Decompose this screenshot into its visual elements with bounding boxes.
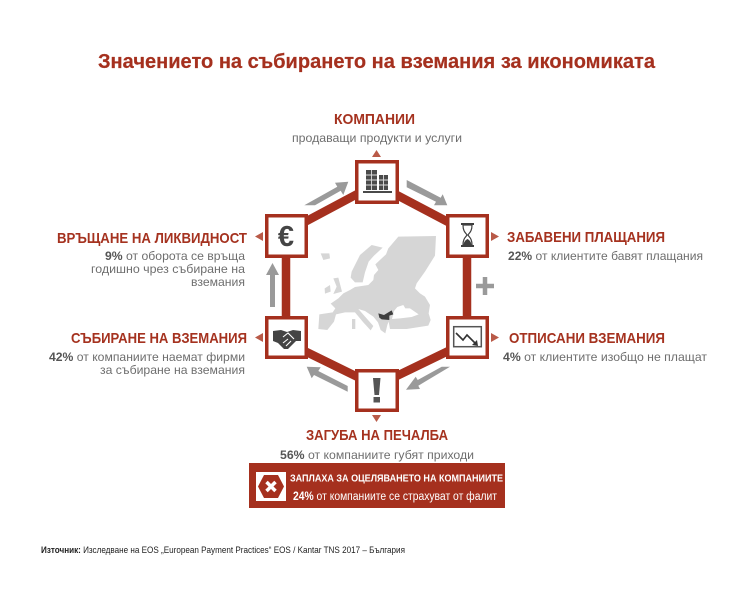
arrow: written-off to lost profit <box>406 367 450 390</box>
label: written-off receivables: 4% от клиентите изобщо не плащат <box>503 350 708 364</box>
box: debt collection with handshake icon <box>267 318 306 357</box>
icon: warning cross <box>256 472 286 501</box>
direction triangles <box>255 150 499 422</box>
label: debt collection: за събиране на вземания <box>100 363 245 377</box>
label: companies <box>292 111 462 145</box>
source note: Източник: Изследване на EOS „European Payment Practices“ EOS / Kantar TNS 2017 – България <box>41 545 405 555</box>
arrow: companies to delayed payments <box>407 180 447 205</box>
label: debt collection: 42% от компаниите наемат фирми <box>49 350 245 364</box>
label: written-off receivables: ОТПИСАНИ ВЗЕМАНИЯ <box>509 330 665 347</box>
label: delayed payments: 22% от клиентите бавят плащания <box>508 249 703 263</box>
label: liquidity return: годишно чрез събиране на <box>91 262 245 276</box>
callout: threat to survival: 24% от компаниите се страхуват от фалит <box>293 491 498 503</box>
box: delayed payments with hourglass icon <box>448 216 487 256</box>
label: liquidity return <box>57 230 247 289</box>
label: liquidity return: ВРЪЩАНЕ НА ЛИКВИДНОСТ <box>57 230 247 247</box>
label: debt collection: СЪБИРАНЕ НА ВЗЕМАНИЯ <box>71 330 247 347</box>
label: liquidity return: вземания <box>191 275 245 289</box>
label: delayed payments: ЗАБАВЕНИ ПЛАЩАНИЯ <box>507 229 665 246</box>
title: Значението на събирането на вземания за икономиката <box>98 50 656 73</box>
box: liquidity return with euro icon: € <box>278 221 294 253</box>
label: liquidity return: 9% от оборота се връща <box>105 249 245 263</box>
label: written-off receivables <box>503 330 708 364</box>
callout: threat to survival: ЗАПЛАХА ЗА ОЦЕЛЯВАНЕТО НА КОМПАНИИТЕ <box>290 472 503 484</box>
red hexagon connector <box>286 184 467 386</box>
box: companies with building icon <box>357 162 397 202</box>
label: debt collection <box>49 330 247 377</box>
arrow: liquidity to companies <box>304 182 348 205</box>
arrow: collection to liquidity <box>266 263 279 307</box>
plus sign <box>476 277 494 295</box>
label: lost profit: ЗАГУБА НА ПЕЧАЛБА <box>306 427 448 444</box>
label: companies: продаващи продукти и услуги <box>292 131 462 145</box>
label: companies: КОМПАНИИ <box>334 111 415 128</box>
box: written-off receivables with chart icon <box>448 318 487 357</box>
label: delayed payments <box>507 229 703 263</box>
box: lost profit with exclamation icon <box>357 371 397 410</box>
callout: threat to survival <box>249 463 505 508</box>
map of Europe <box>318 236 436 333</box>
arrow: lost profit to collection <box>307 367 348 392</box>
box: liquidity return with euro icon <box>267 216 306 256</box>
label: lost profit <box>280 427 474 462</box>
label: lost profit: 56% от компаниите губят приходи <box>280 448 474 462</box>
